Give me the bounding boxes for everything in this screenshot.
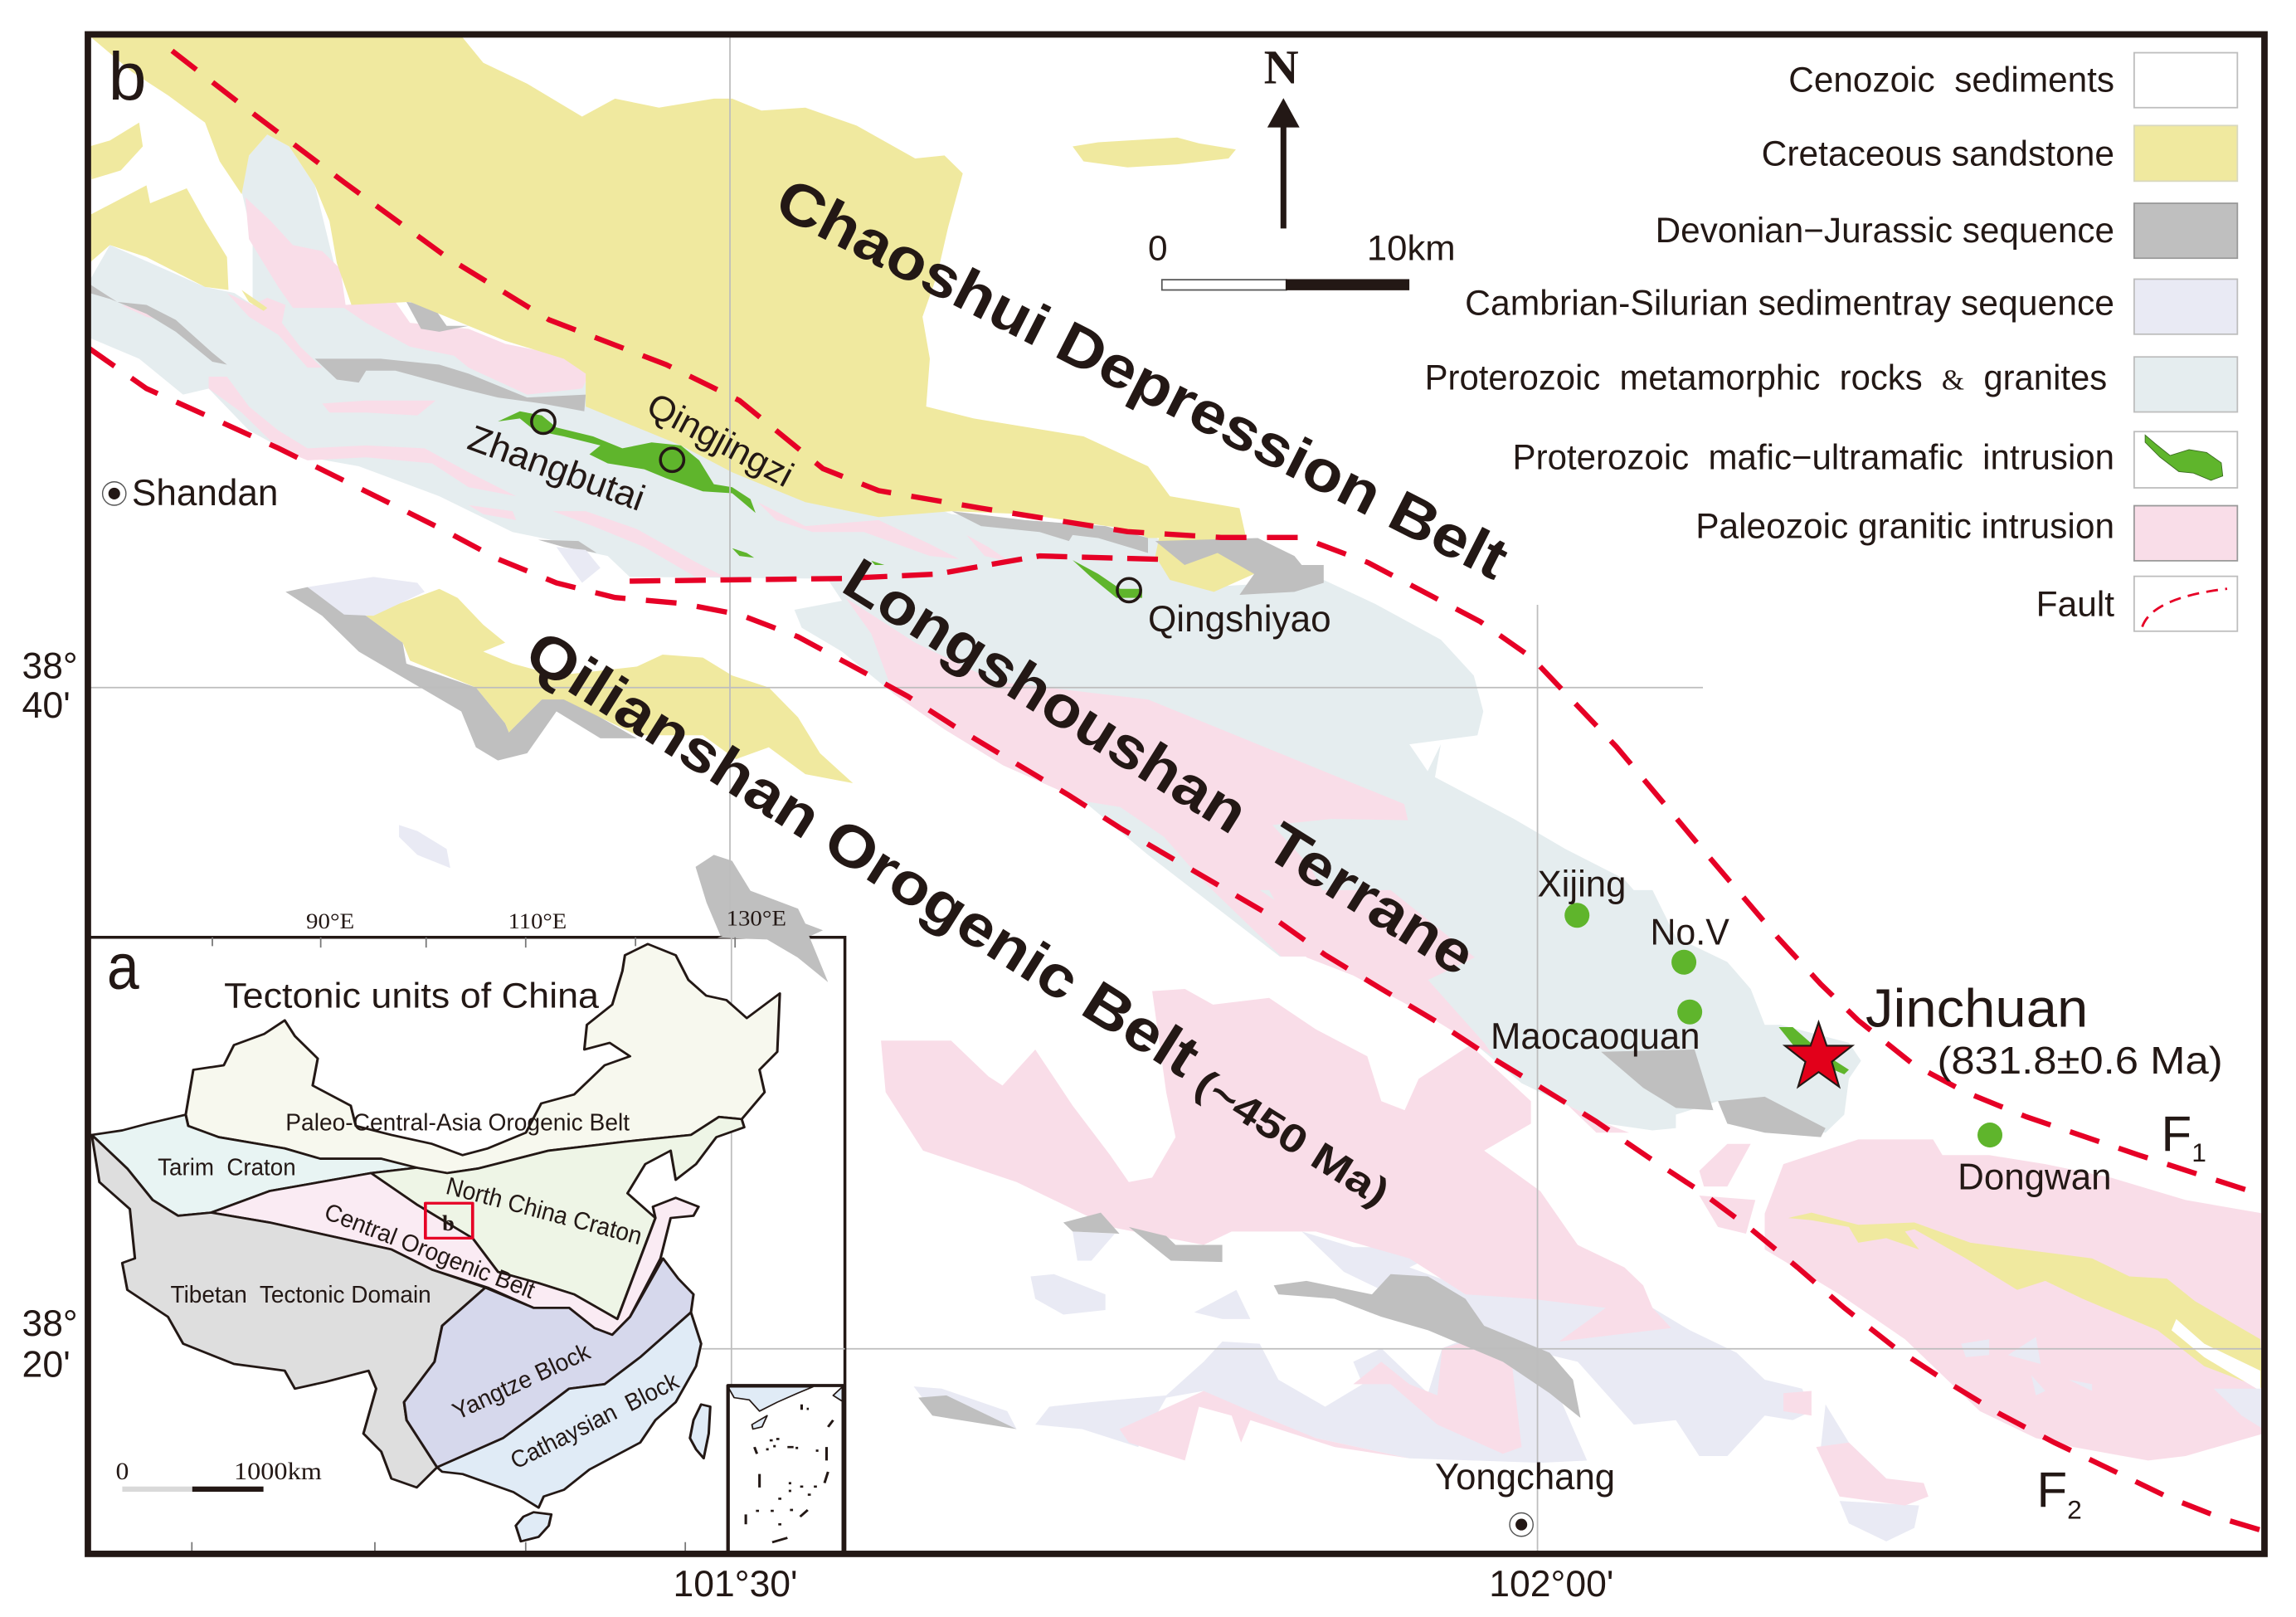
label Paleo-Central-Asia: Paleo-Central-Asia Orogenic Belt xyxy=(285,1109,630,1136)
longitude labels over inset: 110°E xyxy=(508,908,567,933)
unit: Central Orogenic Belt xyxy=(211,1173,698,1335)
place labels: Yongchang xyxy=(1435,1457,1615,1498)
panel a: inset map of China xyxy=(88,932,845,1552)
unit: Devonian-Jurassic west xyxy=(90,284,1148,938)
heading: age of orogenic belt: (~450 Ma) xyxy=(1187,1061,1397,1215)
legend: Fault: Fault xyxy=(2036,584,2114,623)
scale bar: 1000km xyxy=(234,1458,322,1485)
island: Hainan xyxy=(516,1512,552,1542)
unit: Jinchuan intrusion xyxy=(1778,1027,1849,1074)
unit: Tarim Craton xyxy=(92,1115,416,1215)
unit: Tibetan Tectonic Domain xyxy=(92,1135,485,1488)
heading: Longshoushan Terrane: Longshoushan Terrane xyxy=(833,545,1486,988)
unit: Paleozoic granite west xyxy=(121,197,1408,957)
north arrow xyxy=(1264,41,1300,228)
legend: Cambrian-Silurian sequence xyxy=(1465,279,2237,334)
label Central Orogenic: Central Orogenic Belt xyxy=(321,1199,538,1304)
star: Jinchuan deposit xyxy=(1785,1022,1852,1087)
longitude labels over inset xyxy=(306,906,786,933)
label Jinchuan: Jinchuan xyxy=(1866,977,2088,1038)
heading: Chaoshui Depression Belt: Chaoshui Depression Belt xyxy=(766,165,1519,592)
place labels: Dongwan xyxy=(1958,1157,2112,1197)
label Cathaysian: Cathaysian Block xyxy=(507,1368,683,1474)
scale bar xyxy=(116,1458,322,1492)
fault F2 xyxy=(90,348,2265,1532)
unit: Cretaceous sandstone north xyxy=(90,36,1254,783)
place labels: Shandan xyxy=(132,473,278,514)
unit: Proterozoic metamorphic rocks north xyxy=(90,134,1675,957)
locator letter b: b xyxy=(442,1210,455,1235)
label age: (831.8±0.6 Ma) xyxy=(1937,1039,2223,1082)
scale bar km: 0 xyxy=(1148,229,1168,268)
fault F1 xyxy=(172,51,2262,1195)
legend: Devonian-Jurassic sequence xyxy=(1656,203,2237,258)
legend: Paleozoic granitic intrusion: Paleozoic granitic intrusion xyxy=(1695,507,2114,546)
place labels: No.V xyxy=(1650,913,1729,953)
longitude labels over inset: 90°E xyxy=(306,908,354,933)
island: Taiwan xyxy=(690,1405,710,1459)
legend: Fault xyxy=(2036,577,2237,631)
unit: mafic intrusions west xyxy=(498,412,1142,598)
town symbol: Yongchang xyxy=(1510,1512,1533,1537)
unit: Paleozoic granite south xyxy=(881,890,2263,1506)
longitude 102 00: 102°00' xyxy=(1489,1564,1613,1605)
scale bar km: 10km xyxy=(1367,229,1456,268)
gray tail over inset xyxy=(718,933,828,982)
scale bar km xyxy=(1148,229,1456,290)
unit: Devonian-Jurassic east of north belt xyxy=(1155,538,1324,595)
label a: a xyxy=(107,932,139,1003)
latitude 38 20 xyxy=(22,1303,78,1385)
unit: North China Craton xyxy=(371,1117,744,1319)
place labels: Maocaoquan xyxy=(1491,1016,1700,1057)
legend: Proterozoic metamorphic rocks and granites xyxy=(1425,357,2237,412)
unit: Cathaysian Block xyxy=(437,1313,701,1507)
unit: Cretaceous sandstone east xyxy=(1788,1213,2263,1391)
tick marks xyxy=(192,938,735,1552)
legend: Proterozoic metamorphic rocks and granites: Proterozoic metamorphic rocks & granites xyxy=(1425,358,2107,397)
unit: Proterozoic metamorphic rocks east xyxy=(1260,890,1861,1132)
label b: b xyxy=(109,39,147,114)
legend: Proterozoic mafic-ultramafic intrusion: Proterozoic mafic−ultramafic intrusion xyxy=(1513,438,2114,477)
unit: Paleo-Central-Asia Orogenic Belt xyxy=(186,944,780,1173)
label F2: F xyxy=(2037,1462,2067,1517)
latitude 38 40 xyxy=(22,645,78,726)
label F1: F xyxy=(2162,1106,2191,1162)
legend: Cenozoic sediments: Cenozoic sediments xyxy=(1788,60,2114,99)
label Tibetan: Tibetan Tectonic Domain xyxy=(171,1282,431,1308)
South China Sea inset xyxy=(728,1386,844,1552)
place labels: Zhangbutai xyxy=(463,418,650,519)
unit: Cambrian-Silurian patches east xyxy=(1961,1337,2263,1429)
inset title: Tectonic units of China xyxy=(224,976,599,1015)
latitude 38 20: 20' xyxy=(22,1344,71,1385)
place labels: Qingshiyao xyxy=(1148,599,1331,640)
place labels: Qingjingzi xyxy=(641,385,800,494)
legend: Cambrian-Silurian sequence: Cambrian-Silurian sedimentray sequence xyxy=(1465,284,2114,323)
legend: Cretaceous sandstone: Cretaceous sandstone xyxy=(1762,134,2114,173)
scale bar: 0 xyxy=(116,1458,129,1485)
legend: Devonian-Jurassic sequence: Devonian−Jurassic sequence xyxy=(1656,211,2114,250)
latitude 38 40: 40' xyxy=(22,685,71,726)
fault branch xyxy=(630,556,1164,581)
legend: Proterozoic mafic-ultramafic intrusion xyxy=(1513,431,2237,488)
legend: Cretaceous sandstone xyxy=(1762,125,2237,181)
longitude 101 30: 101°30' xyxy=(674,1564,798,1605)
label Yangtze: Yangtze Block xyxy=(449,1338,595,1425)
unit: Cambrian-Silurian west xyxy=(308,547,601,868)
longitude labels over inset: 130°E xyxy=(727,906,786,931)
unit: Devonian-Jurassic south xyxy=(918,1050,1826,1429)
unit: Cambrian-Silurian south xyxy=(914,1231,1919,1542)
latitude 38 40: 38° xyxy=(22,645,78,686)
locator box b xyxy=(426,1203,473,1238)
legend: Cenozoic sediments xyxy=(1788,53,2237,108)
legend: Paleozoic granitic intrusion xyxy=(1695,506,2237,561)
heading: Qilianshan Orogenic Belt: Qilianshan Orogenic Belt xyxy=(514,617,1211,1089)
label North China: North China Craton xyxy=(443,1172,645,1250)
town symbol: Shandan xyxy=(103,482,126,505)
place labels xyxy=(132,385,2112,1498)
north arrow: N xyxy=(1264,41,1299,95)
label F1: 1 xyxy=(2191,1137,2206,1167)
legend xyxy=(1425,53,2237,631)
label Tarim: Tarim Craton xyxy=(158,1155,296,1181)
latitude 38 20: 38° xyxy=(22,1303,78,1344)
label F2: 2 xyxy=(2067,1495,2082,1525)
unit: Yangtze Block xyxy=(404,1259,693,1468)
place labels: Xijing xyxy=(1538,864,1626,904)
deposit markers xyxy=(532,410,2002,1147)
